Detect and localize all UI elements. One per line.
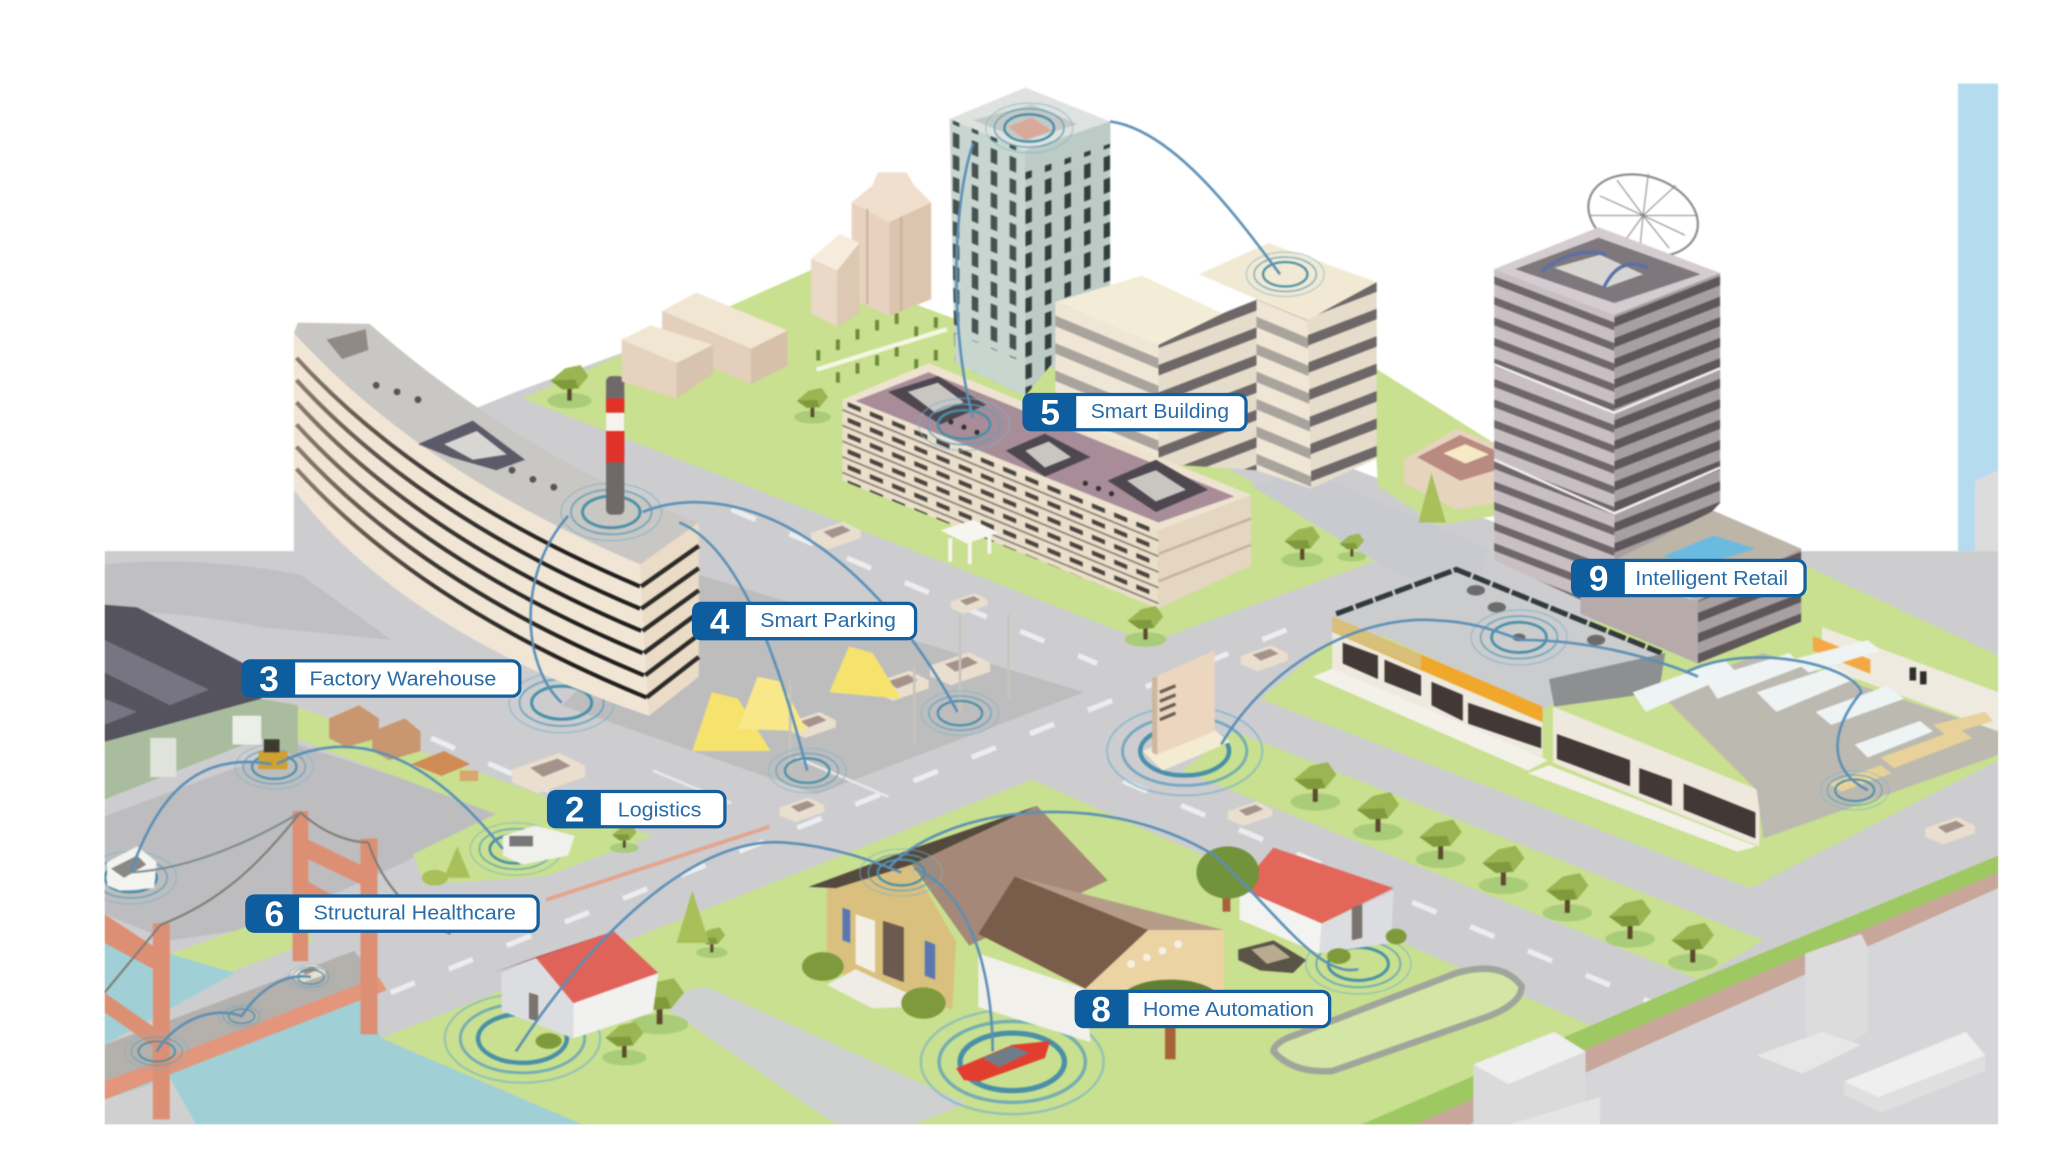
label 4: Smart Parking: 4: [710, 602, 730, 641]
retail building: [1313, 569, 1759, 852]
lawn path: [816, 329, 947, 370]
lawns: [171, 268, 1998, 1125]
trees: [422, 365, 1718, 1065]
label 8: Home Automation: Home Automation: [1143, 999, 1314, 1021]
label 2: Logistics: Logistics: [618, 799, 701, 821]
label 6: Structural Healthcare: Structural Healthcare: [313, 903, 516, 925]
label 9: Intelligent Retail: 9: [1589, 559, 1608, 598]
label 4: Smart Parking: [692, 602, 916, 641]
cargo boxes: [329, 705, 478, 781]
trucks and cars: [107, 522, 1975, 891]
monolith sign: [1143, 650, 1230, 771]
label 6: Structural Healthcare: [246, 895, 538, 934]
label 9: Intelligent Retail: [1571, 559, 1805, 598]
parking light cones: [692, 614, 1008, 771]
water: [104, 935, 583, 1125]
road kerb: [546, 827, 769, 900]
forklift: [259, 739, 287, 769]
label 5: Smart Building: Smart Building: [1091, 401, 1229, 423]
red car: [956, 1041, 1050, 1081]
ground and roads: [104, 274, 1998, 1125]
label 4: Smart Parking: Smart Parking: [760, 610, 896, 632]
tall grey office tower: [1494, 227, 1720, 615]
label 5: Smart Building: [1023, 393, 1246, 432]
red roof house left: [492, 931, 658, 1049]
label 9: Intelligent Retail: Intelligent Retail: [1635, 568, 1788, 590]
red roof house right: [1240, 848, 1407, 964]
curved office building: [294, 323, 699, 716]
podium with pool: [1580, 511, 1801, 664]
green glass tower: [950, 88, 1110, 396]
house driveway: [653, 986, 967, 1125]
small pavilion: [1404, 428, 1496, 509]
warehouse: [104, 605, 298, 799]
rooftop and lot signal rings: [125, 103, 1889, 1070]
label 6: Structural Healthcare: 6: [264, 895, 284, 934]
parking lot: [562, 575, 1084, 803]
low beige buildings: [622, 293, 788, 398]
ferris wheel: [1586, 172, 1700, 256]
tree row behind block: [816, 313, 938, 383]
sky strip at right edge: [1958, 84, 1998, 551]
label 8: Home Automation: 8: [1091, 990, 1111, 1029]
label 5: Smart Building: 5: [1040, 393, 1060, 432]
label 2: Logistics: 2: [565, 791, 584, 830]
label 3: Factory Warehouse: Factory Warehouse: [310, 669, 496, 691]
lower right district: [1361, 856, 1998, 1125]
ground-level signal rings: [445, 483, 1411, 1114]
label 3: Factory Warehouse: [242, 660, 520, 699]
label 2: Logistics: [547, 790, 725, 830]
signal rings under vehicles: [85, 673, 614, 904]
label 8: Home Automation: [1075, 990, 1330, 1029]
label 3: Factory Warehouse: 3: [259, 660, 279, 699]
long office block: [842, 363, 1251, 609]
beige towers: [811, 172, 931, 327]
dark car: [1238, 940, 1306, 973]
bridge: [104, 811, 451, 1119]
garden trees: [1121, 846, 1259, 1059]
cream striped block: [1055, 243, 1377, 488]
sensor link curves: [131, 121, 1868, 1051]
big house: [802, 806, 1224, 1042]
chimney: [606, 376, 624, 515]
open floor plan store: [1633, 627, 1998, 839]
side road beside lawn: [1252, 484, 1391, 562]
oval track: [1273, 969, 1522, 1071]
bottom left road: [104, 1078, 196, 1125]
entrance canopy: [940, 520, 999, 564]
road dashes: [391, 509, 1659, 1006]
